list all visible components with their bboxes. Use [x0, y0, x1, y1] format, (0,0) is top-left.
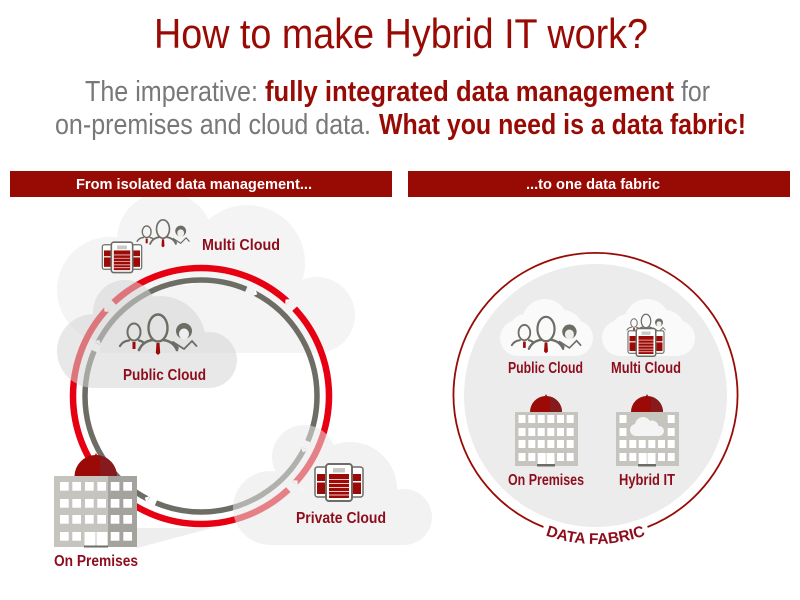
subtitle: for [681, 76, 710, 108]
label: private cloud: Private Cloud [296, 510, 386, 527]
heading bar left: From isolated data management... [76, 176, 312, 193]
panel: isolated data management [10, 171, 432, 570]
shadow under building [137, 528, 212, 548]
heading bar right: ...to one data fabric [526, 176, 660, 193]
integration ring [73, 268, 329, 524]
icon: private cloud server [315, 464, 363, 501]
public cloud [57, 280, 237, 388]
inner fabric disc [464, 264, 727, 527]
icon: multi cloud people [137, 220, 189, 247]
subtitle: fully integrated data management [265, 76, 674, 108]
icon: multi cloud server [102, 242, 142, 273]
label: multi cloud: Multi Cloud [202, 237, 280, 254]
multi cloud tile: Multi Cloud [611, 360, 681, 377]
icon: public cloud people [120, 314, 196, 355]
subtitle: on-premises and cloud data. [55, 109, 371, 141]
on premises tile: On Premises [508, 472, 584, 489]
private cloud [233, 425, 432, 545]
multi cloud background [57, 192, 355, 353]
hybrid IT tile: Hybrid IT [619, 472, 675, 489]
subtitle [55, 76, 746, 141]
public cloud tile: Public Cloud [508, 360, 583, 377]
heading bar right [408, 171, 790, 197]
title: How to make Hybrid IT work? [154, 10, 648, 57]
panel: one data fabric [408, 171, 790, 544]
hybrid IT tile [616, 394, 679, 489]
arc label: data fabric: DATA FABRIC [546, 526, 644, 544]
label: on premises: On Premises [54, 553, 138, 570]
label: public cloud: Public Cloud [123, 367, 206, 384]
subtitle: The imperative: [85, 76, 258, 108]
icon: on premises building [54, 453, 137, 548]
subtitle: What you need is a data fabric! [379, 109, 746, 141]
outer fabric ring [454, 253, 738, 527]
heading bar left [10, 171, 392, 197]
on premises tile [508, 394, 584, 489]
public cloud tile [500, 299, 593, 377]
multi cloud tile [602, 299, 695, 377]
